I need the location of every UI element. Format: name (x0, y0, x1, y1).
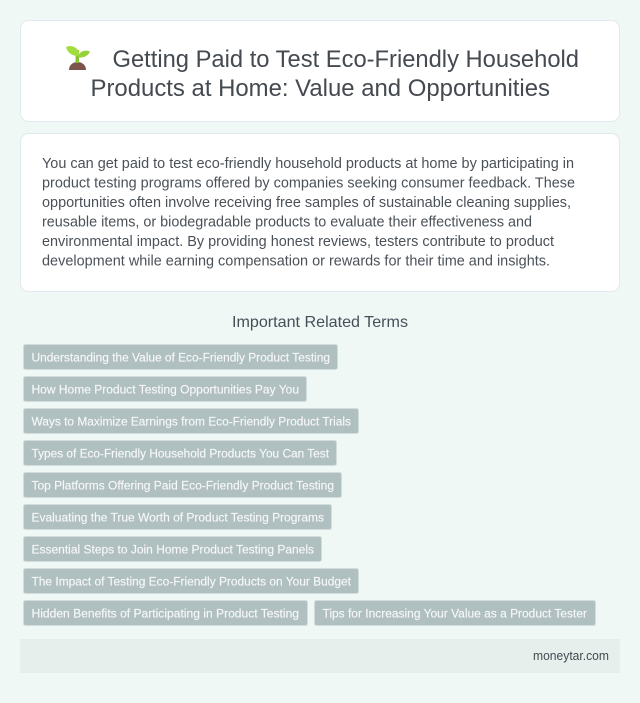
tag 10 (314, 600, 596, 626)
tag 8: The Impact of Testing Eco-Friendly Products on Your Budget (32, 574, 352, 588)
panel: intro paragraph: reusable items, or biodegradable products to evaluate their effectiveness and (42, 214, 532, 230)
tag 2: How Home Product Testing Opportunities Pay You (32, 382, 299, 396)
tag 3: Ways to Maximize Earnings from Eco-Friendly Product Trials (32, 414, 351, 428)
tag 3 (24, 408, 358, 434)
tag 4: Types of Eco-Friendly Household Products You Can Test (32, 446, 330, 460)
tag 2 (24, 376, 306, 402)
tag 5 (24, 472, 342, 498)
tag 8 (24, 568, 358, 594)
tag 9: Hidden Benefits of Participating in Product Testing (32, 606, 299, 620)
footer (20, 639, 620, 673)
title text: Getting Paid to Test Eco-Friendly Household (112, 46, 579, 73)
panel: title card (20, 20, 620, 122)
panel: intro paragraph: opportunities often involve receiving free samples of sustainable cleaning supplies, (42, 195, 571, 211)
tag list (24, 344, 596, 626)
tag 6 (24, 504, 332, 530)
footer: moneytar.com (533, 648, 609, 663)
tag 10: Tips for Increasing Your Value as a Product Tester (322, 606, 587, 620)
tag 7 (24, 536, 322, 562)
icon: seedling (66, 46, 90, 70)
panel: intro paragraph: product testing programs offered by companies seeking consumer feedback. These (42, 176, 575, 192)
tag 7: Essential Steps to Join Home Product Testing Panels (32, 542, 314, 556)
heading: important related terms: Important Related Terms (232, 314, 408, 331)
panel: intro paragraph: development while earning compensation or rewards for their time and insights. (42, 254, 550, 270)
tag 6: Evaluating the True Worth of Product Testing Programs (32, 510, 324, 524)
title text (90, 46, 579, 102)
tag 4 (24, 440, 336, 466)
title text: Products at Home: Value and Opportunities (90, 75, 550, 102)
panel: intro paragraph (20, 134, 620, 292)
tag 9 (24, 600, 308, 626)
tag 5: Top Platforms Offering Paid Eco-Friendly Product Testing (32, 478, 334, 492)
tag 1: Understanding the Value of Eco-Friendly Product Testing (32, 350, 330, 364)
tag 1 (24, 344, 338, 370)
panel: intro paragraph: You can get paid to test eco-friendly household products at home by participating in (42, 156, 574, 172)
panel: intro paragraph: environmental impact. By providing honest reviews, testers contribute to product (42, 234, 554, 250)
